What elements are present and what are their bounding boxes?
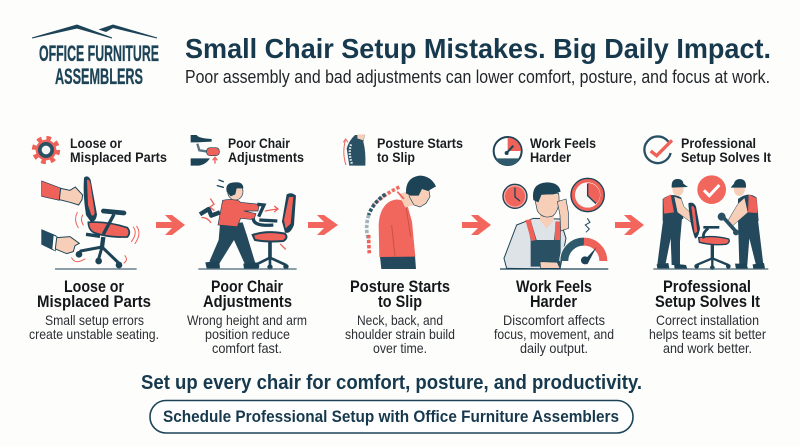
- logo: Office Furniture Assemblers: OFFICE FURNITURE: [39, 41, 159, 66]
- heading: to Slip: [378, 293, 422, 311]
- description: and work better.: [663, 341, 752, 356]
- icon: timer gauge: [494, 137, 522, 166]
- description: [494, 313, 614, 356]
- step label: [377, 136, 463, 165]
- arrow: [308, 215, 338, 235]
- step label: [228, 136, 304, 165]
- step label: Adjustments: [228, 150, 304, 165]
- step label: Setup Solves It: [681, 150, 771, 165]
- description: focus, movement, and: [494, 327, 614, 342]
- description: comfort fast.: [212, 341, 282, 356]
- description: shoulder strain build: [345, 327, 455, 342]
- heading: Harder: [530, 293, 578, 311]
- step label: Posture Starts: [377, 136, 463, 151]
- icon: gear: [34, 138, 58, 162]
- description: Correct installation: [656, 313, 759, 328]
- step label: Professional: [681, 136, 756, 151]
- step label: [530, 136, 596, 165]
- description: daily output.: [520, 341, 588, 356]
- icon: chair adjustment: [191, 135, 219, 166]
- description: create unstable seating.: [29, 327, 159, 342]
- heading: Misplaced Parts: [37, 293, 151, 311]
- description: Small setup errors: [45, 313, 144, 328]
- description: helps teams sit better: [649, 327, 766, 342]
- heading: Work Feels: [516, 278, 592, 296]
- step label: Work Feels: [530, 136, 596, 151]
- step label: Poor Chair: [228, 136, 291, 151]
- illustration: man struggling with chair: [198, 180, 297, 270]
- step label: Loose or: [70, 136, 123, 151]
- heading: [37, 278, 151, 311]
- heading: Adjustments: [203, 293, 292, 311]
- description: position reduce: [205, 327, 290, 342]
- panel: work feels harder: [494, 136, 614, 356]
- heading: Posture Starts: [350, 278, 450, 296]
- panel: poor chair adjustments: [187, 135, 307, 356]
- call to action button: [150, 400, 633, 433]
- closing tagline: Set up every chair for comfort, posture, and productivity.: [141, 371, 642, 394]
- call to action button: Schedule Professional Setup with Office Furniture Assemblers: [163, 408, 619, 426]
- heading: [655, 278, 761, 311]
- description: Discomfort affects: [503, 313, 605, 328]
- step label: to Slip: [377, 150, 415, 165]
- step label: Misplaced Parts: [70, 150, 167, 165]
- panel: professional setup solves it: [644, 136, 771, 356]
- description: [649, 313, 766, 356]
- illustration: two technicians assembling a chair: [653, 175, 768, 270]
- heading: Professional: [663, 278, 751, 296]
- heading: [203, 278, 292, 311]
- title: Small Chair Setup Mistakes. Big Daily Impact.: [185, 33, 771, 64]
- heading: [516, 278, 592, 311]
- illustration: wobbling chair with hands: [42, 176, 139, 269]
- description: Wrong height and arm: [187, 313, 307, 328]
- step label: [70, 136, 167, 165]
- heading: [350, 278, 450, 311]
- panel: posture starts to slip: [343, 134, 463, 356]
- logo: Office Furniture Assemblers: ASSEMBLERS: [55, 64, 143, 89]
- heading: Poor Chair: [211, 278, 284, 296]
- description: Neck, back, and: [357, 313, 443, 328]
- panel: loose or misplaced parts: [29, 136, 167, 342]
- description: [345, 313, 455, 356]
- description: [29, 313, 159, 342]
- arrow: [156, 215, 185, 235]
- heading: Loose or: [64, 278, 125, 296]
- icon: spine: [343, 134, 365, 166]
- illustration: slouching figure with curved spine: [367, 176, 436, 269]
- arrow: [615, 215, 644, 235]
- heading: Setup Solves It: [655, 293, 761, 311]
- description: [187, 313, 307, 356]
- step label: Harder: [530, 150, 572, 165]
- description: over time.: [373, 341, 427, 356]
- step label: [681, 136, 771, 165]
- illustration: tired worker with clocks and gauge: [500, 178, 608, 269]
- icon: check circle: [644, 136, 672, 163]
- logo: Office Furniture Assemblers: [32, 25, 159, 89]
- arrow: [462, 215, 491, 235]
